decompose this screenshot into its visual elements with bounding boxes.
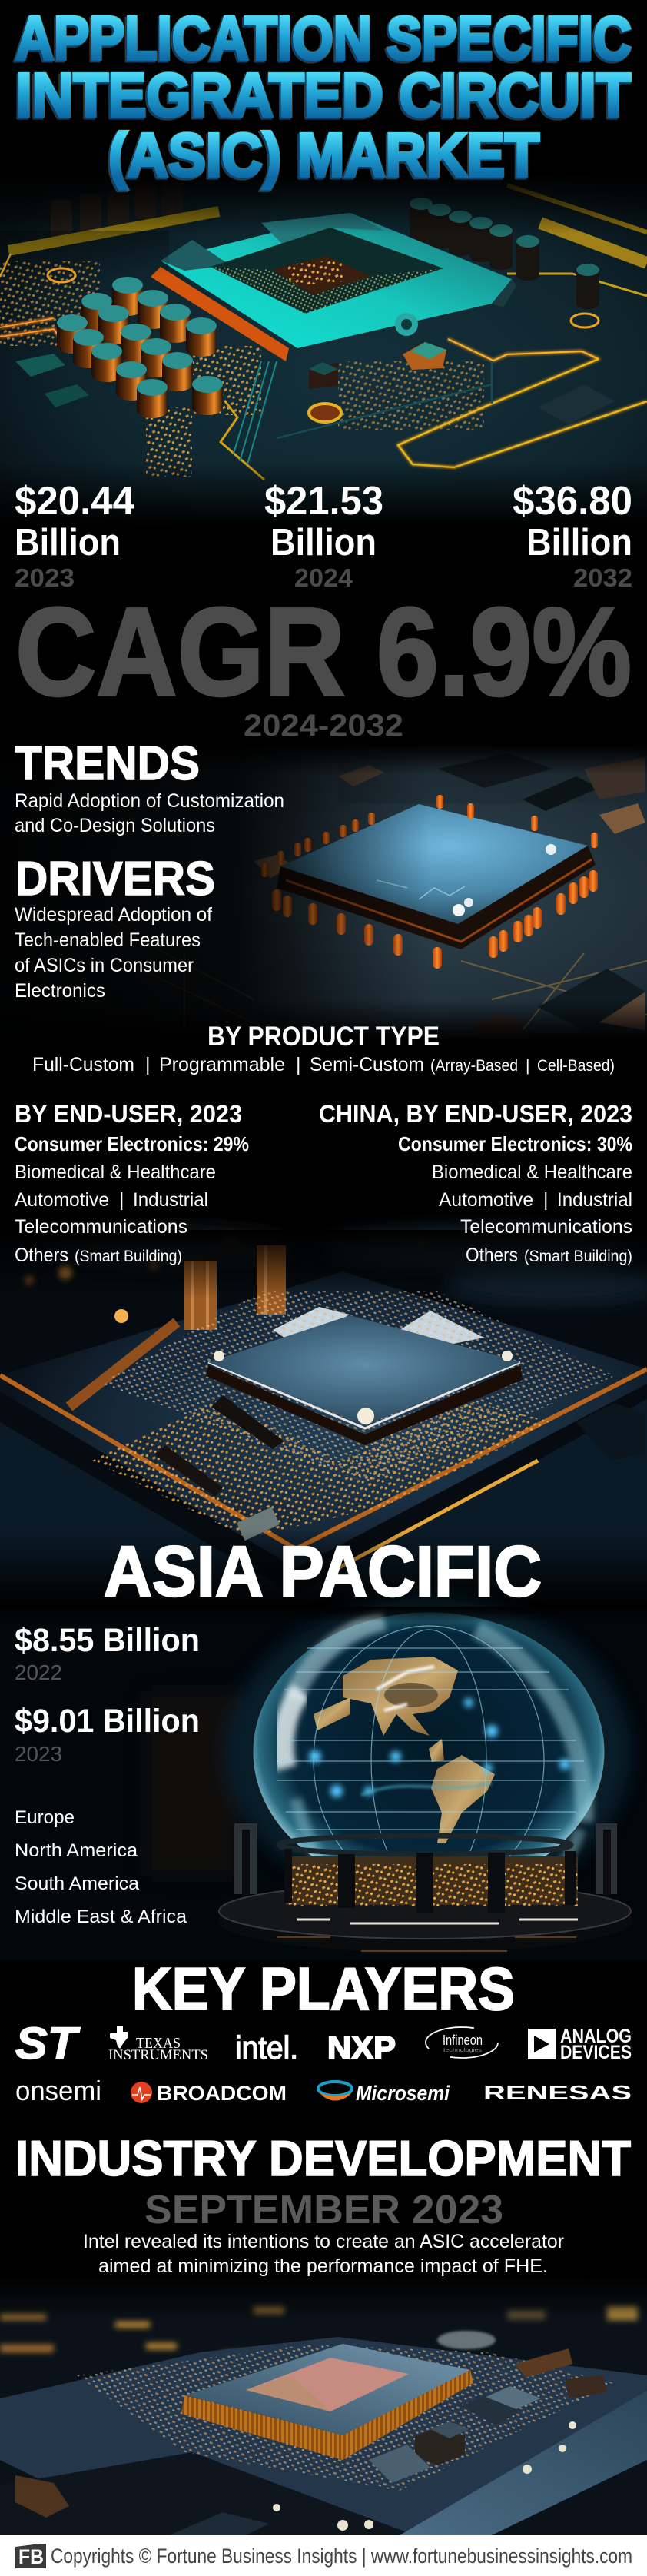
panel: by end-user: BY END-USER, 2023 bbox=[15, 1100, 242, 1128]
logo: Texas Instruments bbox=[108, 2026, 208, 2063]
heading: drivers: Tech-enabled Features bbox=[15, 929, 201, 951]
heading: by product type: | bbox=[145, 1054, 151, 1075]
heading: by product type: Programmable bbox=[159, 1054, 285, 1075]
logo: Microsemi: Microsemi bbox=[356, 2082, 450, 2105]
image: circuit board with cyan socket bbox=[0, 173, 647, 542]
heading: industry development: INDUSTRY DEVELOPMENT bbox=[15, 2130, 631, 2186]
panel: china by end-user: (Smart Building) bbox=[524, 1248, 632, 1265]
stat: 2032 value: Billion bbox=[526, 522, 632, 563]
stats: asia pacific values: $9.01 Billion bbox=[15, 1703, 200, 1740]
heading: by product type: Full-Custom bbox=[32, 1054, 134, 1075]
heading: drivers: DRIVERS bbox=[15, 853, 215, 906]
heading: asia pacific: ASIA PACIFIC bbox=[104, 1531, 542, 1611]
image: blue chip on board with orange pins bbox=[0, 744, 647, 1041]
dome base bbox=[217, 1823, 632, 1953]
panel: by end-user: Industrial bbox=[133, 1189, 208, 1211]
heading: by product type: Semi-Custom bbox=[310, 1054, 424, 1075]
panel: china by end-user: Automotive bbox=[439, 1189, 533, 1211]
stat: 2023 value: Billion bbox=[15, 522, 121, 563]
heading: trends: and Co-Design Solutions bbox=[15, 815, 215, 836]
panel: by end-user: Others bbox=[15, 1245, 68, 1266]
panel: by end-user: Telecommunications bbox=[15, 1216, 187, 1238]
heading: by product type: (Array-Based bbox=[430, 1057, 518, 1075]
regions list: North America bbox=[15, 1840, 138, 1861]
panel: by end-user: (Smart Building) bbox=[75, 1248, 182, 1265]
CAGR: 2024-2032 bbox=[244, 709, 403, 743]
logo: Renesas: RENESAS bbox=[483, 2081, 632, 2104]
stat: 2023 value: $20.44 bbox=[15, 479, 134, 524]
logo: ST: ST bbox=[15, 2019, 81, 2069]
stat: 2024 value: 2024 bbox=[294, 563, 353, 592]
heading: drivers: Widespread Adoption of bbox=[15, 904, 212, 926]
logo: Infineon: technologies bbox=[443, 2048, 483, 2053]
stat: 2032 value bbox=[513, 479, 632, 592]
stat: 2024 value: $21.53 bbox=[264, 479, 383, 524]
title bbox=[15, 4, 632, 189]
footer bbox=[0, 2535, 647, 2576]
heading: by product type: | bbox=[526, 1057, 529, 1075]
stat: 2023 value bbox=[15, 479, 134, 592]
socket bbox=[151, 213, 516, 361]
stat: 2032 value: 2032 bbox=[573, 563, 632, 592]
stat: 2023 value: 2023 bbox=[15, 563, 75, 592]
panel: china by end-user: CHINA, BY END-USER, 2023 bbox=[319, 1100, 632, 1128]
logo: Texas Instruments: TEXAS bbox=[136, 2035, 181, 2052]
panel: by end-user: Automotive bbox=[15, 1189, 109, 1211]
logo: onsemi: onsemi bbox=[15, 2075, 101, 2106]
text: development description: Intel revealed its intentions to create an ASIC accelerator bbox=[83, 2231, 564, 2252]
capacitors bbox=[57, 277, 223, 418]
panel: china by end-user bbox=[319, 1100, 632, 1266]
logo: Texas Instruments: INSTRUMENTS bbox=[108, 2047, 208, 2063]
logos: key players bbox=[15, 2019, 632, 2106]
heading: trends: Rapid Adoption of Customization bbox=[15, 790, 284, 812]
panel: by end-user: | bbox=[119, 1189, 124, 1211]
regions list: South America bbox=[15, 1873, 140, 1894]
stat: 2024 value bbox=[264, 479, 383, 592]
panel: by end-user bbox=[15, 1100, 249, 1266]
panel: by end-user: Biomedical & Healthcare bbox=[15, 1162, 216, 1183]
panel: china by end-user: Telecommunications bbox=[460, 1216, 632, 1238]
logo: Broadcom: BROADCOM bbox=[157, 2082, 287, 2105]
text: development description: aimed at minimizing the performance impact of FHE. bbox=[98, 2255, 548, 2277]
heading: drivers: of ASICs in Consumer bbox=[15, 955, 194, 976]
logo: NXP: NXP bbox=[327, 2029, 396, 2066]
text: development description bbox=[83, 2231, 564, 2277]
stats: asia pacific values: 2023 bbox=[15, 1742, 62, 1766]
logo: Analog Devices: ANALOG bbox=[560, 2026, 632, 2047]
heading: drivers: Electronics bbox=[15, 980, 105, 1002]
heading: by product type: Cell-Based) bbox=[537, 1057, 615, 1075]
logo: Analog Devices bbox=[528, 2026, 632, 2063]
image: chip with pink label bbox=[0, 2275, 647, 2537]
heading: by product type: BY PRODUCT TYPE bbox=[207, 1022, 440, 1052]
heading: drivers bbox=[15, 853, 215, 1002]
logo: intel: intel. bbox=[235, 2029, 298, 2066]
regions list: Middle East & Africa bbox=[15, 1906, 187, 1927]
panel: china by end-user: | bbox=[543, 1189, 549, 1211]
panel: by end-user: Consumer Electronics: 29% bbox=[15, 1132, 249, 1155]
heading: september 2023: SEPTEMBER 2023 bbox=[144, 2188, 503, 2232]
heading: by product type: | bbox=[296, 1054, 301, 1075]
regions list: Europe bbox=[15, 1807, 75, 1828]
icon: footer logo: FB bbox=[18, 2545, 44, 2568]
stats: asia pacific values: $8.55 Billion bbox=[15, 1622, 200, 1659]
stat: 2024 value: Billion bbox=[270, 522, 377, 563]
panel: china by end-user: Biomedical & Healthcare bbox=[432, 1162, 632, 1183]
stats: asia pacific values bbox=[15, 1622, 200, 1766]
image: globe in glass dome bbox=[0, 1599, 647, 1960]
logo: Analog Devices: DEVICES bbox=[560, 2042, 632, 2063]
regions list bbox=[15, 1807, 187, 1927]
title: (ASIC) MARKET bbox=[108, 121, 539, 189]
panel: china by end-user: Industrial bbox=[557, 1189, 632, 1211]
logo: Infineon bbox=[426, 2027, 498, 2058]
stat: 2032 value: $36.80 bbox=[513, 479, 632, 524]
heading: by product type bbox=[32, 1022, 615, 1075]
heading: trends bbox=[15, 737, 284, 836]
logo: Infineon: Infineon bbox=[443, 2033, 483, 2048]
heading: key players: KEY PLAYERS bbox=[132, 1955, 515, 2023]
logo: Microsemi bbox=[318, 2082, 450, 2105]
image: dark chip on blue board bbox=[0, 1227, 647, 1607]
heading: trends: TRENDS bbox=[15, 737, 200, 790]
stats: asia pacific values: 2022 bbox=[15, 1660, 62, 1684]
panel: china by end-user: Others bbox=[466, 1245, 518, 1266]
